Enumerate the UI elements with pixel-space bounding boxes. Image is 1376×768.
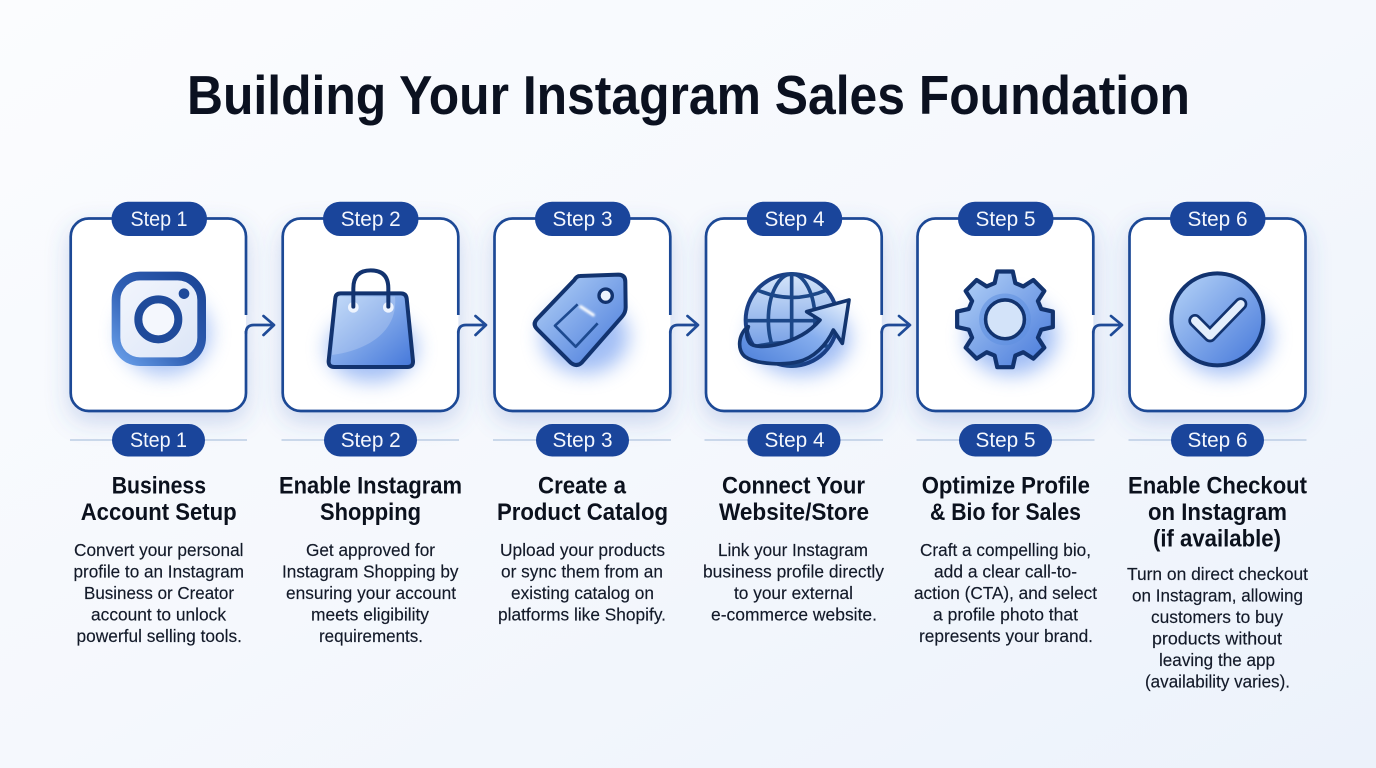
- description 2: requirements.: [319, 626, 423, 646]
- description 6: on Instagram, allowing: [1132, 586, 1303, 606]
- description 3: platforms like Shopify.: [498, 604, 666, 624]
- heading 2: Shopping: [320, 499, 421, 526]
- heading 4: Connect Your: [722, 472, 865, 500]
- description 4: business profile directly: [703, 562, 884, 582]
- card outline 5: [918, 218, 1093, 411]
- panel: step 6: [1127, 202, 1308, 691]
- top badge 2: Step 2: [341, 207, 401, 231]
- description 5: add a clear call-to-: [934, 562, 1077, 582]
- description 2: Get approved for: [306, 540, 435, 560]
- arrow: step 4 to step 5: [882, 316, 910, 335]
- description 3: existing catalog on: [511, 583, 654, 603]
- description 1: [74, 540, 244, 646]
- divider badge 5: [916, 424, 1094, 456]
- card outline 6: [1130, 218, 1306, 411]
- card outline 3: [494, 218, 670, 411]
- arrow: step 5 to step 6: [1093, 316, 1122, 335]
- heading 6: [1128, 472, 1307, 552]
- description 1: Convert your personal: [74, 540, 244, 560]
- heading 2: [279, 472, 462, 526]
- description 1: powerful selling tools.: [76, 626, 242, 646]
- panel: step 3: [493, 202, 698, 624]
- divider badge 5: Step 5: [976, 428, 1036, 452]
- divider badge 6: Step 6: [1188, 428, 1248, 452]
- icon: instagram: [116, 276, 210, 375]
- top badge 5: Step 5: [976, 207, 1036, 231]
- divider badge 1: [70, 424, 247, 456]
- card outline 1: [71, 218, 246, 411]
- top badge 6: [1170, 202, 1266, 236]
- icon: gear: [957, 271, 1057, 375]
- heading 6: on Instagram: [1148, 499, 1287, 526]
- heading 3: Product Catalog: [497, 499, 668, 526]
- heading 1: Account Setup: [81, 499, 237, 526]
- description 2: Instagram Shopping by: [282, 562, 459, 582]
- icon: price tag: [535, 275, 628, 373]
- icon: shopping bag: [327, 270, 417, 382]
- top badge 6: Step 6: [1188, 207, 1248, 231]
- arrow: step 2 to step 3: [458, 316, 486, 335]
- description 1: profile to an Instagram: [74, 562, 244, 582]
- heading 5: Optimize Profile: [922, 472, 1090, 500]
- heading 6: (if available): [1153, 526, 1281, 552]
- description 2: ensuring your account: [286, 583, 456, 603]
- description 5: represents your brand.: [919, 626, 1093, 646]
- heading 2: Enable Instagram: [279, 472, 462, 500]
- heading 5: [922, 472, 1090, 526]
- heading 4: Website/Store: [719, 499, 869, 526]
- divider badge 1: Step 1: [130, 428, 187, 452]
- panel: step 4: [703, 202, 910, 624]
- top badge 2: [323, 202, 418, 236]
- icon: globe with arrow: [740, 274, 850, 375]
- heading 5: & Bio for Sales: [930, 499, 1081, 526]
- description 6: [1127, 564, 1308, 692]
- description 1: account to unlock: [91, 604, 226, 624]
- heading 3: Create a: [538, 472, 627, 500]
- description 5: [914, 540, 1097, 646]
- description 6: Turn on direct checkout: [1127, 564, 1308, 584]
- description 5: Craft a compelling bio,: [920, 540, 1091, 560]
- divider badge 3: [493, 424, 671, 456]
- divider badge 6: [1128, 424, 1306, 456]
- divider badge 2: Step 2: [341, 428, 401, 452]
- divider badge 4: [704, 424, 883, 456]
- divider badge 3: Step 3: [552, 428, 613, 452]
- description 6: leaving the app: [1159, 650, 1275, 670]
- heading 3: [497, 472, 668, 526]
- divider badge 4: Step 4: [764, 428, 825, 452]
- heading 1: Business: [112, 472, 206, 500]
- description 2: meets eligibility: [311, 604, 429, 624]
- description 3: Upload your products: [500, 540, 665, 560]
- top badge 4: [747, 202, 842, 236]
- description 1: Business or Creator: [84, 583, 234, 603]
- arrow: step 1 to step 2: [246, 316, 274, 335]
- top badge 5: [958, 202, 1054, 236]
- description 4: e-commerce website.: [711, 604, 877, 624]
- description 5: a profile photo that: [933, 604, 1078, 624]
- description 3: or sync them from an: [501, 562, 663, 582]
- description 2: [282, 540, 459, 646]
- panel: step 5: [914, 202, 1122, 646]
- heading 1: [81, 472, 237, 526]
- top badge 3: Step 3: [552, 207, 613, 231]
- description 6: customers to buy: [1151, 607, 1283, 627]
- description 4: [703, 540, 884, 624]
- divider badge 2: [282, 424, 459, 456]
- description 4: to your external: [734, 583, 853, 603]
- title: Building Your Instagram Sales Foundation: [187, 64, 1190, 126]
- top badge 4: Step 4: [764, 207, 825, 231]
- top badge 3: [535, 202, 630, 236]
- description 4: Link your Instagram: [718, 540, 868, 560]
- heading 4: [719, 472, 869, 526]
- card outline 4: [706, 218, 882, 411]
- heading 6: Enable Checkout: [1128, 472, 1307, 500]
- top badge 1: [112, 202, 207, 236]
- panel: step 1: [70, 202, 274, 646]
- icon: check circle: [1171, 273, 1272, 375]
- arrow: step 3 to step 4: [670, 316, 698, 335]
- description 5: action (CTA), and select: [914, 583, 1097, 603]
- description 6: products without: [1152, 628, 1282, 648]
- top badge 1: Step 1: [130, 207, 188, 231]
- panel: step 2: [279, 202, 486, 646]
- description 6: (availability varies).: [1145, 672, 1290, 692]
- card outline 2: [283, 218, 458, 411]
- description 3: [498, 540, 666, 624]
